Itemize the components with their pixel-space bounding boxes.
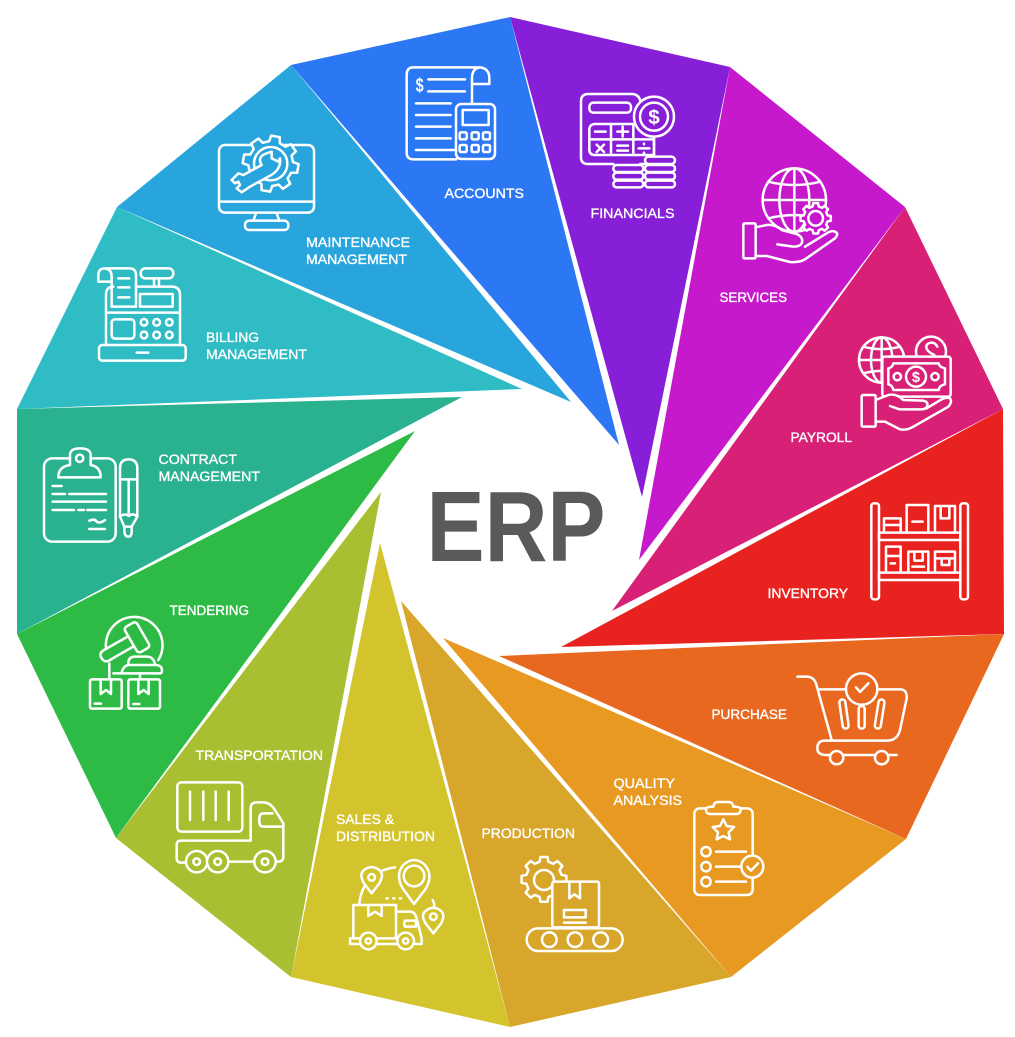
panel: inventory — [561, 409, 1004, 647]
label: CONTRACT — [158, 451, 237, 467]
label: QUALITY — [614, 775, 676, 791]
icon: hand holding globe and gear — [743, 168, 837, 262]
icon: hand holding money and globe: $ — [912, 370, 920, 386]
wedge — [116, 492, 381, 977]
panel: services — [639, 67, 905, 560]
label: MAINTENANCE — [306, 234, 410, 250]
label: PAYROLL — [790, 429, 852, 445]
label: PURCHASE — [712, 706, 787, 722]
panel: financials — [510, 17, 730, 497]
wedge — [499, 634, 1004, 839]
wedge — [612, 207, 1003, 611]
icon: clipboard and pencil — [44, 448, 137, 542]
wedge — [117, 65, 571, 402]
label: TENDERING — [170, 602, 249, 618]
icon: delivery truck and map pins — [350, 860, 443, 949]
label: SALES & — [336, 811, 395, 827]
icon: auction gavel and boxes — [90, 617, 162, 709]
label: SERVICES — [720, 289, 787, 305]
icon: hand holding money and globe — [859, 337, 951, 430]
panel: sales and distribution — [291, 543, 510, 1027]
icon: checklist clipboard — [694, 802, 763, 895]
panel: maintenance management — [117, 65, 571, 402]
label line two: MANAGEMENT — [306, 251, 407, 267]
wedge — [443, 638, 906, 977]
wedge — [561, 409, 1004, 647]
wedge — [639, 67, 905, 560]
icon: calculator and coins — [581, 94, 675, 187]
icon: cash register — [98, 268, 186, 361]
label line two: ANALYSIS — [614, 792, 682, 808]
label line two: MANAGEMENT — [206, 346, 307, 362]
wedge — [401, 601, 731, 1027]
wedge — [510, 17, 730, 497]
label line two: MANAGEMENT — [158, 468, 260, 484]
label: ACCOUNTS — [444, 185, 524, 201]
label: FINANCIALS — [590, 205, 674, 221]
icon: invoice and calculator — [407, 67, 495, 159]
label: PRODUCTION — [482, 825, 575, 841]
icon: monitor with gear and wrench — [219, 132, 314, 230]
label: INVENTORY — [768, 585, 849, 601]
panel: contract management — [17, 397, 462, 634]
wedge — [291, 17, 619, 445]
icon: calculator and coins: $ — [648, 106, 660, 129]
panel: billing management — [17, 207, 522, 409]
panel: purchase — [499, 634, 1004, 839]
panel: quality analysis — [443, 638, 906, 977]
panel: production — [401, 601, 731, 1027]
wedge — [17, 397, 462, 634]
panel: tendering — [17, 431, 415, 838]
label line two: DISTRIBUTION — [336, 828, 435, 844]
wedge — [17, 431, 415, 838]
label: BILLING — [206, 329, 259, 345]
icon: container truck — [177, 782, 283, 872]
panel: payroll — [612, 207, 1003, 611]
panel: accounts — [291, 17, 619, 445]
wedge — [17, 207, 522, 409]
center title: ERP: ERP — [426, 471, 606, 583]
icon: conveyor with box and gear — [522, 857, 623, 951]
icon: shopping cart — [797, 673, 907, 764]
label: TRANSPORTATION — [196, 747, 323, 763]
icon: invoice and calculator: $ — [416, 76, 424, 97]
icon: warehouse shelves — [871, 503, 968, 599]
wedge — [291, 543, 510, 1027]
panel: transportation — [116, 492, 381, 977]
